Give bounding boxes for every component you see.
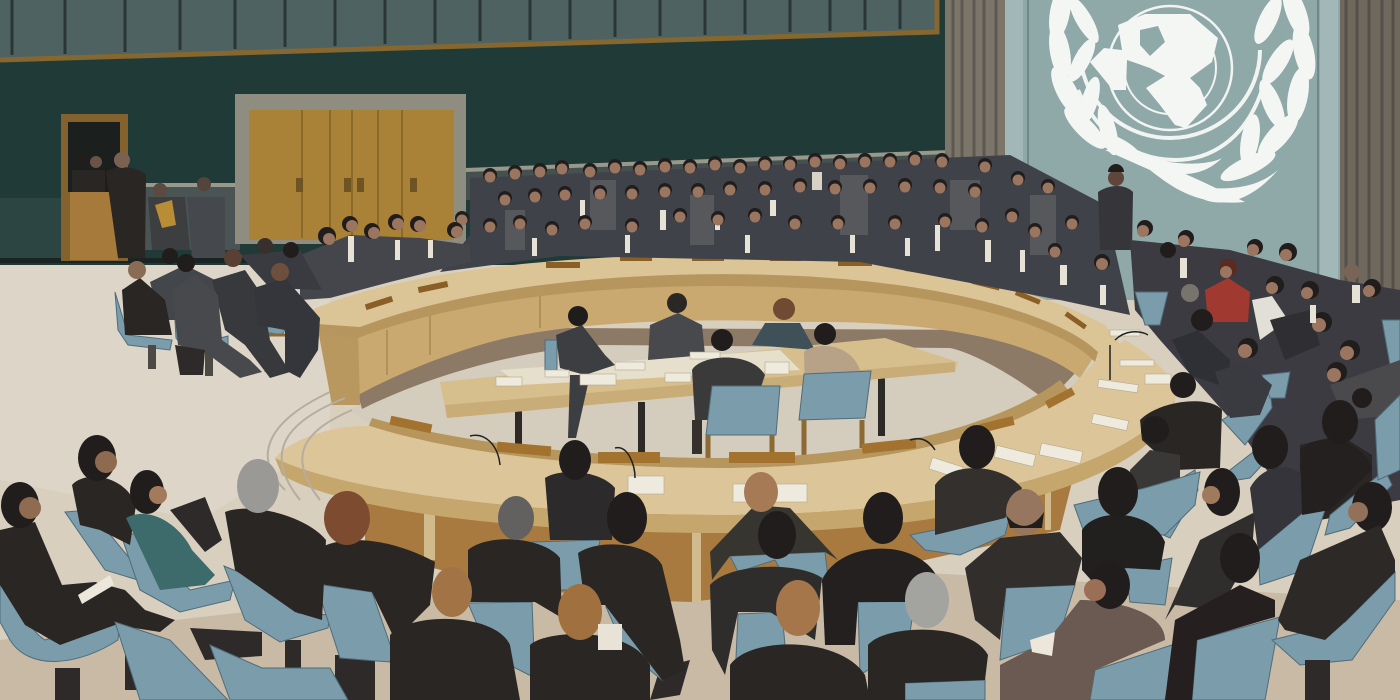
delegate right of desk <box>935 468 1022 535</box>
delegate upper far right <box>1250 467 1315 550</box>
near desk inner lip <box>368 380 1068 468</box>
seated row faces <box>323 218 463 245</box>
left group chairs <box>115 292 288 356</box>
gallery lighter jackets <box>505 175 1056 255</box>
delegate dark far right <box>1300 440 1372 515</box>
delegate near desk right <box>1140 401 1222 470</box>
right crowd heads <box>1137 220 1381 408</box>
grey hair delegate <box>868 630 988 700</box>
near desk outer lip <box>275 400 1175 533</box>
brown hair delegate <box>730 644 870 700</box>
right crowd shirts <box>1180 258 1360 323</box>
notepad <box>78 575 114 604</box>
seated row bodies <box>300 235 470 300</box>
seated delegate left <box>556 325 615 438</box>
audience figure grey hair <box>225 509 326 620</box>
delegate behind <box>710 567 822 675</box>
central table <box>440 338 958 452</box>
left delegates behind desk <box>300 214 470 300</box>
bald delegate with paper <box>530 634 650 700</box>
emblem rings <box>1078 6 1262 160</box>
bald delegate <box>390 619 520 700</box>
far desk nameplates <box>365 256 1087 329</box>
right crowd faces <box>1137 225 1375 382</box>
floor arcs <box>268 392 352 500</box>
gallery shirts <box>532 172 1106 305</box>
back wall <box>0 0 950 265</box>
emblem globe <box>1090 14 1218 128</box>
large delegate far right <box>1278 525 1395 640</box>
seated row heads <box>318 214 463 245</box>
far desk end block <box>318 290 540 405</box>
row of blue chairs mid right <box>1140 395 1400 538</box>
head <box>1 482 39 528</box>
front row <box>115 525 1395 700</box>
near nameplates <box>389 387 1075 463</box>
dark delegate centre <box>578 544 685 680</box>
body <box>0 522 175 645</box>
delegate in tan jacket <box>804 346 860 395</box>
double doors <box>235 94 466 244</box>
shadow band of far desk <box>358 328 1092 409</box>
chair <box>0 565 120 661</box>
chair leg <box>1305 660 1330 700</box>
central table people <box>496 293 871 458</box>
right mid delegates <box>1130 395 1400 538</box>
front chairs <box>115 572 1395 700</box>
seated delegate centre <box>648 313 705 360</box>
left side group <box>115 238 322 378</box>
delegate in white <box>1252 296 1288 340</box>
right side crowd <box>1130 220 1400 520</box>
delegate lower right of desk <box>1130 450 1180 500</box>
emblem right laurel <box>1105 0 1320 203</box>
leg shadows behind chairs <box>125 628 690 700</box>
seated delegate front left with notes <box>0 482 175 700</box>
back rows of front audience <box>65 400 1392 700</box>
audience figure grey head back <box>468 539 562 618</box>
gallery bodies <box>440 155 1130 315</box>
microphones <box>470 332 1148 478</box>
near desk top <box>275 340 1176 515</box>
delegate mid far right <box>1165 512 1255 620</box>
delegate upper right <box>1300 435 1372 520</box>
emblem greenland <box>1140 26 1165 56</box>
seated row shirts <box>348 236 433 262</box>
gallery heads hair <box>455 151 1110 270</box>
audience figure auburn hair <box>316 540 435 640</box>
right crowd body mass <box>1130 240 1400 520</box>
balding delegate <box>710 505 838 580</box>
dark delegate lower right <box>1165 585 1275 700</box>
inner floor of table ring <box>350 333 1100 466</box>
chair behind speaker <box>545 340 557 370</box>
standing delegate by emblem <box>1098 164 1133 250</box>
gallery crowd <box>440 151 1130 315</box>
delegate standing dark <box>822 549 936 645</box>
curtains <box>945 0 1400 300</box>
audience heads <box>78 400 1392 559</box>
left delegates <box>240 250 322 290</box>
back row chairs <box>65 472 1325 680</box>
right crowd dark figures <box>1172 330 1230 388</box>
delegate in red <box>1205 278 1250 322</box>
emblem panel <box>1005 0 1340 300</box>
audience figure seated left back <box>72 477 136 545</box>
UN emblem <box>1045 0 1320 203</box>
far desk top <box>288 255 1125 362</box>
near papers <box>628 330 1171 502</box>
delegate seated right <box>1082 515 1165 590</box>
nameplates and papers on near desk <box>389 330 1171 502</box>
brown jacket delegate <box>1000 600 1165 700</box>
balding delegate right <box>965 532 1082 640</box>
delegate chair back facing <box>692 358 765 420</box>
near desk wood front <box>365 470 1075 602</box>
right crowd chairs <box>1135 292 1400 470</box>
door left <box>61 114 128 261</box>
seated delegate right <box>752 323 815 350</box>
ceiling frieze <box>0 0 937 60</box>
emblem left laurel <box>1045 0 1222 174</box>
audience figure in teal <box>126 514 215 590</box>
people at door <box>72 152 225 258</box>
far desk inner wall <box>358 279 1095 395</box>
gallery faces <box>456 154 1108 270</box>
standing figure at desk <box>545 472 615 540</box>
papers <box>496 352 789 386</box>
left group chair legs <box>148 345 213 376</box>
